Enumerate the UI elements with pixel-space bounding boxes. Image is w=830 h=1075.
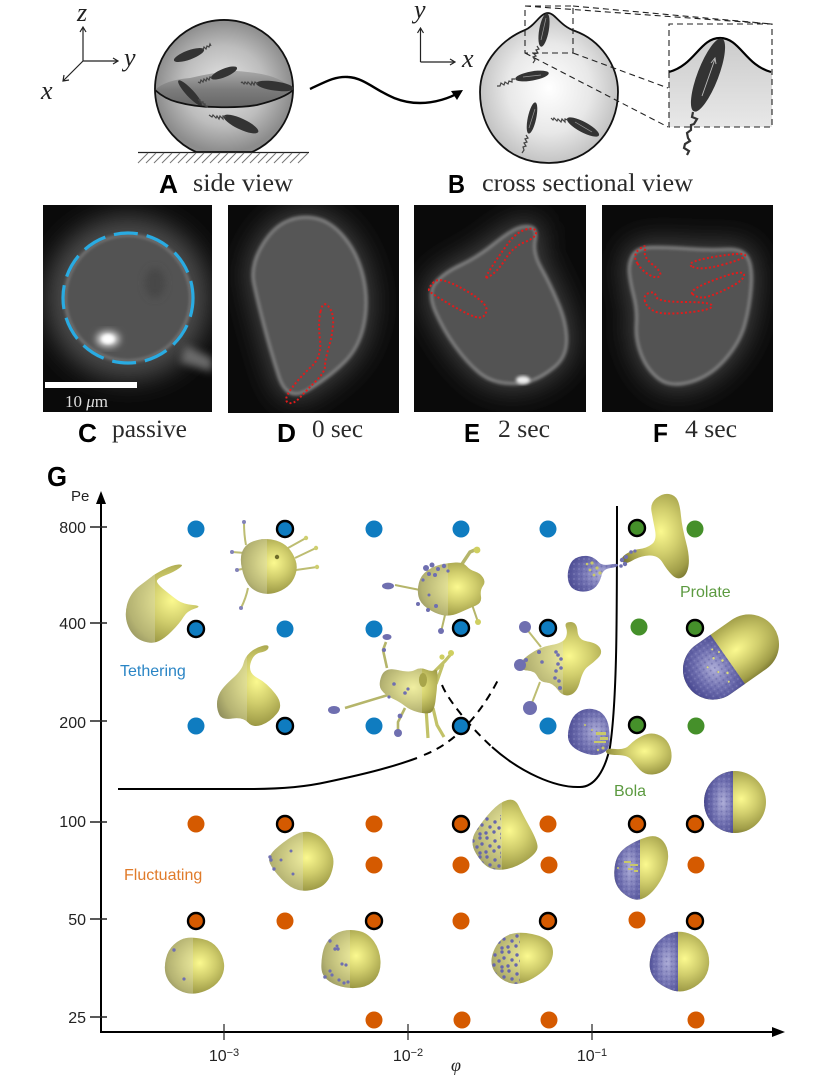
x axis phi: φ bbox=[451, 1055, 461, 1075]
y axis Pe bbox=[59, 488, 107, 1032]
vesicle: six tethers bbox=[230, 520, 319, 610]
caption C: passive bbox=[112, 416, 187, 443]
caption E: E bbox=[464, 418, 480, 448]
caption A: side view bbox=[193, 170, 293, 197]
panel E: 2 sec photo bbox=[414, 205, 586, 412]
y axis Pe: Pe bbox=[71, 488, 89, 505]
label Prolate: Prolate bbox=[680, 584, 731, 601]
caption D bbox=[277, 416, 363, 448]
panel F: 4 sec photo bbox=[602, 205, 773, 412]
vesicle: one tether bbox=[217, 645, 280, 726]
caption F: F bbox=[653, 418, 668, 448]
y axis Pe: 400 bbox=[59, 616, 86, 633]
bola and prolate regime dots bbox=[629, 520, 704, 734]
caption E bbox=[464, 416, 550, 448]
vesicle: dumbbell crossing boundary upper bbox=[568, 494, 689, 592]
vesicle: prolate capsule bbox=[671, 603, 791, 711]
caption F: 4 sec bbox=[685, 416, 737, 443]
vesicle: fluctuating peaked with particles bbox=[472, 800, 538, 870]
x axis phi bbox=[100, 1024, 785, 1075]
vesicle: star shaped with long tethers bbox=[328, 634, 454, 738]
x axis phi: −2 bbox=[411, 1047, 423, 1059]
vesicle: fluctuating sphere few particles bbox=[164, 938, 224, 994]
panel A: vesicle side view bbox=[155, 20, 294, 152]
axes: xyz orientation: y bbox=[121, 43, 136, 72]
panel C: passive vesicle photo: 10 μm bbox=[65, 392, 108, 411]
axes: xy orientation bbox=[411, 0, 474, 73]
fluctuating regime dots bbox=[188, 816, 704, 1028]
axes: xy orientation: x bbox=[461, 44, 474, 73]
caption D: 0 sec bbox=[312, 416, 363, 443]
ground hatch bbox=[138, 152, 309, 163]
x axis phi: 10 bbox=[577, 1048, 595, 1065]
panel G label: G bbox=[47, 461, 67, 492]
vesicle: tethering two tubes bbox=[126, 564, 198, 643]
caption B: B bbox=[448, 169, 465, 199]
curved arrow from A to B bbox=[310, 77, 463, 103]
vesicle: fluctuating half blue oval bbox=[614, 836, 668, 900]
y axis Pe: 50 bbox=[68, 912, 86, 929]
y axis Pe: 800 bbox=[59, 520, 86, 537]
x axis phi: −1 bbox=[595, 1047, 607, 1059]
vesicle: fluctuating sphere more particles bbox=[321, 930, 381, 988]
y axis Pe: 100 bbox=[59, 814, 86, 831]
caption B: cross sectional view bbox=[482, 170, 693, 197]
vesicle: lobed with particle clumps bbox=[514, 620, 606, 715]
panel B: cross section bbox=[480, 12, 618, 163]
panel C: passive vesicle photo bbox=[43, 205, 212, 412]
x axis phi: 10 bbox=[209, 1048, 227, 1065]
vesicle: fluctuating pointed bbox=[268, 832, 334, 891]
vesicle: fluctuating dense particles bbox=[491, 932, 553, 984]
caption A bbox=[159, 169, 293, 199]
caption D: D bbox=[277, 418, 296, 448]
axes: xyz orientation: x bbox=[40, 76, 53, 105]
x axis phi: 10 bbox=[393, 1048, 411, 1065]
caption C bbox=[78, 416, 187, 448]
caption F bbox=[653, 416, 737, 448]
phase boundary curves bbox=[118, 506, 617, 789]
caption C: C bbox=[78, 418, 97, 448]
x axis phi: −3 bbox=[227, 1047, 239, 1059]
caption A: A bbox=[159, 169, 178, 199]
label Fluctuating: Fluctuating bbox=[124, 867, 202, 884]
y axis Pe: 25 bbox=[68, 1010, 86, 1027]
vesicle: half covered sphere bbox=[704, 771, 768, 833]
vesicle: bola lower bbox=[568, 708, 672, 774]
tethering regime dots bbox=[188, 520, 556, 734]
inset zoom of tether bbox=[525, 6, 772, 155]
panel D: 0 sec photo bbox=[228, 205, 399, 413]
y axis Pe: 200 bbox=[59, 715, 86, 732]
label Bola: Bola bbox=[614, 783, 646, 800]
vesicle: fluctuating half blue sphere bbox=[650, 932, 710, 992]
vesicle: many tethers with clump bbox=[382, 547, 488, 634]
label Tethering: Tethering bbox=[120, 663, 186, 680]
axes: xyz orientation bbox=[40, 0, 136, 105]
caption E: 2 sec bbox=[498, 416, 550, 443]
